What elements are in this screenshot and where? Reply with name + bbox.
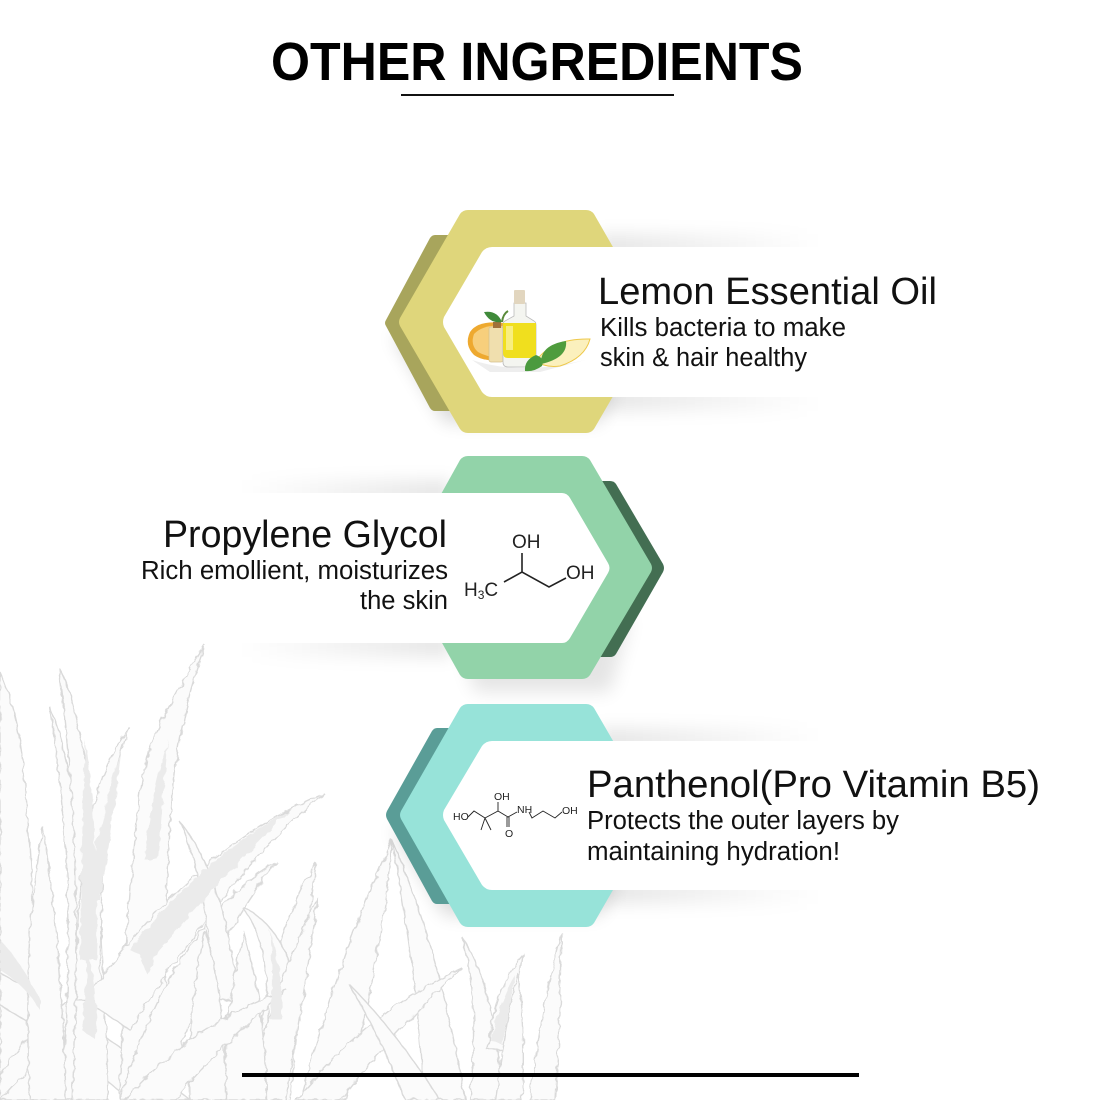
icon: propylene glycol molecule: OH	[566, 563, 594, 584]
icon: panthenol molecule: HO	[453, 811, 469, 823]
description: propylene glycol: Rich emollient, moisturizes	[141, 557, 448, 585]
back hexagon	[386, 728, 462, 904]
back hexagon	[590, 481, 664, 657]
description: propylene glycol	[141, 557, 448, 615]
back hexagon	[385, 235, 460, 411]
front hexagon	[400, 704, 656, 927]
description: propylene glycol: the skin	[360, 587, 448, 615]
panel: lemon essential oil	[385, 210, 937, 433]
front hexagon	[399, 210, 656, 433]
description: panthenol	[587, 807, 899, 866]
icon: propylene glycol molecule	[464, 532, 594, 602]
heading: propylene glycol: Propylene Glycol	[163, 514, 447, 556]
icon: panthenol molecule	[453, 791, 578, 840]
description: panthenol: Protects the outer layers by	[587, 807, 899, 835]
white card	[443, 741, 830, 890]
icon: propylene glycol molecule: C	[484, 580, 498, 601]
icon: propylene glycol molecule: 3	[478, 588, 485, 602]
heading: lemon essential oil: Lemon Essential Oil	[598, 271, 937, 313]
front hexagon	[400, 456, 652, 679]
description: lemon essential oil: skin & hair healthy	[600, 344, 807, 372]
icon: panthenol molecule: O	[505, 828, 513, 840]
panel: propylene glycol	[130, 456, 664, 692]
icon: propylene glycol molecule: OH	[512, 532, 540, 553]
description: lemon essential oil: Kills bacteria to make	[600, 314, 846, 342]
description: panthenol: maintaining hydration!	[587, 838, 840, 866]
heading: panthenol: Panthenol(Pro Vitamin B5)	[587, 764, 1040, 806]
icon: lemon oil bottle	[468, 290, 590, 372]
icon: panthenol molecule: NH	[517, 804, 532, 816]
icon: propylene glycol molecule: H	[464, 580, 478, 601]
panel: panthenol	[386, 704, 1040, 927]
description: lemon essential oil	[600, 314, 846, 372]
title: OTHER INGREDIENTS	[271, 32, 803, 92]
white card	[130, 493, 610, 643]
background: aloe vera line illustration	[0, 645, 562, 1100]
icon: panthenol molecule: OH	[494, 791, 510, 803]
icon: panthenol molecule: OH	[562, 805, 578, 817]
white card	[443, 247, 830, 397]
bottom rule	[242, 1073, 859, 1077]
